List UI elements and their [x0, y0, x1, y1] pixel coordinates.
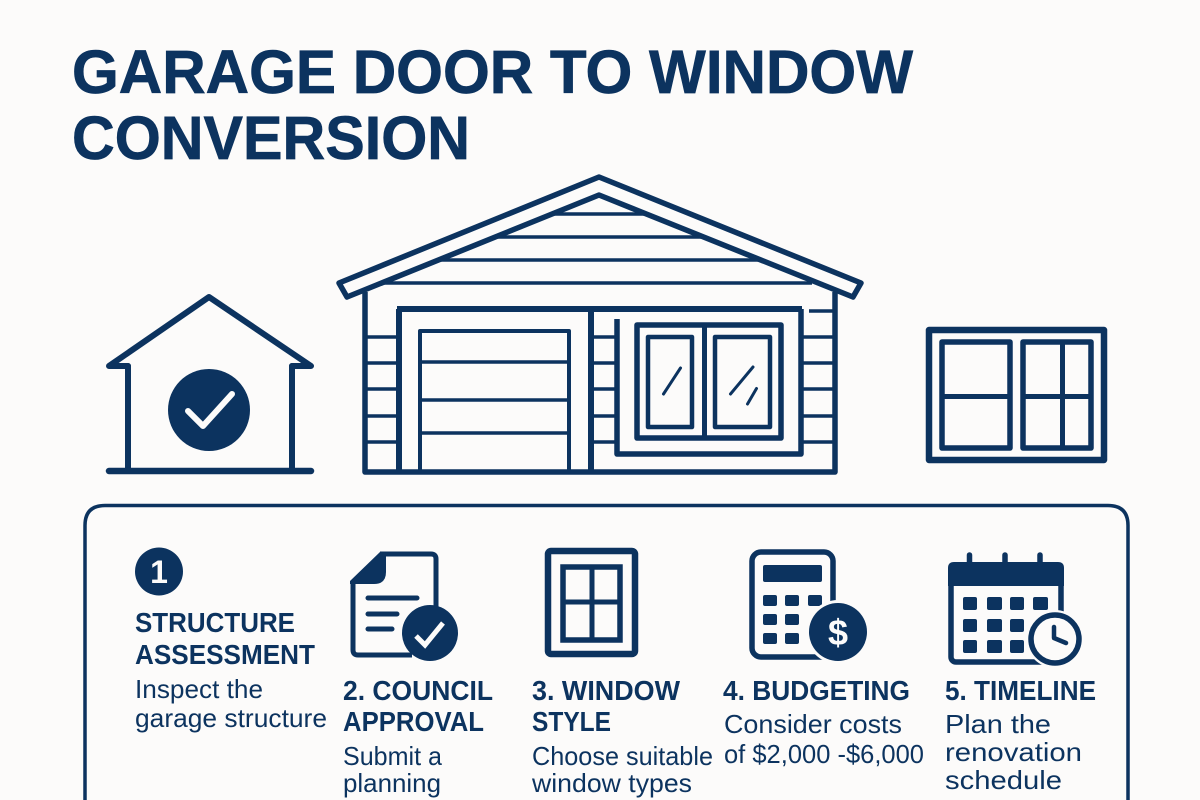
title: CONVERSION [72, 104, 470, 172]
garage door frame [397, 309, 802, 472]
icon: window [929, 330, 1104, 460]
step 2: council approval: Submit a [343, 741, 443, 771]
step 1: structure assessment: ASSESSMENT [135, 639, 315, 670]
step 4: budgeting [723, 552, 924, 769]
double window [637, 325, 781, 438]
title: GARAGE DOOR TO WINDOW [72, 38, 913, 106]
icon: house with check mark [109, 297, 311, 471]
step 3: window style: window types [531, 768, 692, 798]
step 1: structure assessment: 1 [150, 554, 168, 590]
step 1: structure assessment: garage structure [135, 703, 327, 733]
step 5: timeline: Plan the [945, 709, 1051, 739]
step 4: budgeting: $ [828, 612, 848, 653]
step 4: budgeting: Consider costs [724, 709, 902, 739]
wall siding [365, 311, 835, 442]
step 2: council approval: APPROVAL [343, 706, 484, 737]
step 3: window style: STYLE [532, 706, 611, 737]
step 3: window style [531, 551, 713, 798]
step 5: timeline: schedule [945, 765, 1062, 795]
walls and floor [365, 292, 835, 472]
step 2: council approval [343, 552, 493, 798]
step 3: window style: Choose suitable [532, 741, 713, 771]
title [72, 38, 913, 172]
roof [339, 177, 861, 297]
step 5: timeline: renovation [945, 737, 1082, 767]
step 2: council approval: planning [343, 768, 441, 798]
step 2: council approval: 2. COUNCIL [343, 675, 493, 706]
step 4: budgeting: of $2,000 -$6,000 [724, 739, 924, 769]
window surround [617, 309, 801, 454]
step 1: structure assessment [135, 548, 327, 733]
step 4: budgeting: 4. BUDGETING [723, 675, 910, 706]
garage door panels [420, 331, 569, 472]
step 5: timeline [945, 555, 1096, 795]
step 5: timeline: 5. TIMELINE [945, 675, 1096, 706]
gable siding [383, 214, 812, 283]
step 3: window style: 3. WINDOW [532, 675, 680, 706]
step 1: structure assessment: Inspect the [135, 674, 263, 704]
step 1: structure assessment: STRUCTURE [135, 607, 295, 638]
illustration: garage with door and window [339, 177, 861, 472]
panel: steps [85, 506, 1128, 800]
